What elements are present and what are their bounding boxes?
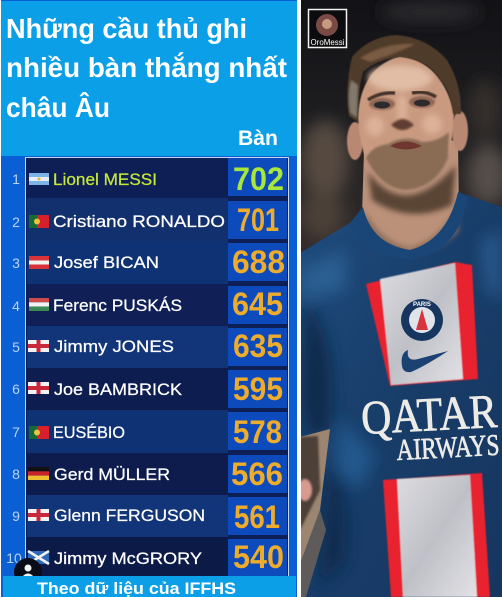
row 3: Josef Bican: Josef BICAN [54, 253, 159, 272]
row 2: Cristiano Ronaldo [12, 198, 287, 241]
nose [391, 119, 414, 130]
row 10: Jimmy McGrory: 540 [233, 539, 284, 575]
row 2: Cristiano Ronaldo: Cristiano RONALDO [53, 212, 225, 231]
row 7: Eusebio: 578 [233, 414, 282, 450]
flag: Argentina [29, 173, 49, 185]
row 9: Glenn Ferguson: 561 [234, 499, 280, 535]
panel header background [1, 1, 297, 156]
row 1: Lionel Messi [12, 158, 287, 198]
title: nhiều bàn thắng nhất [6, 52, 287, 83]
ears [347, 111, 468, 160]
flag: Scotland [28, 551, 49, 564]
hair [348, 35, 461, 122]
eyes [374, 100, 430, 108]
left ranking panel [1, 0, 297, 597]
hair highlights [360, 44, 415, 62]
jersey shading [300, 230, 502, 590]
eye sockets [369, 96, 435, 110]
row 4: Ferenc Puskas [12, 284, 287, 326]
row 5: Jimmy Jones: 5 [12, 339, 20, 355]
flag: Northern Ireland [28, 509, 49, 521]
title: Những cầu thủ ghi [6, 13, 247, 44]
neck shadow [368, 165, 456, 214]
footer source bar [3, 576, 296, 597]
row 4: Ferenc Puskas: 645 [232, 286, 283, 322]
row 6: Joe Bambrick [12, 368, 287, 410]
channel logo: OroMessi: OroMessi [310, 37, 345, 47]
row 10: Jimmy McGrory: 10 [6, 550, 22, 566]
row 10: Jimmy McGrory [6, 537, 287, 576]
row 3: Josef Bican: 688 [232, 244, 285, 280]
row 6: Joe Bambrick: 6 [12, 381, 20, 397]
flag: Northern Ireland [28, 340, 49, 352]
row 9: Glenn Ferguson: 9 [12, 508, 20, 524]
row 7: Eusebio: 7 [12, 424, 20, 440]
row 5: Jimmy Jones: Jimmy JONES [54, 337, 174, 356]
beard [366, 132, 449, 190]
forearm tattoo [298, 429, 330, 597]
PSG badge: PARIS [413, 302, 431, 308]
neck [362, 140, 459, 250]
icon: user avatar [14, 558, 42, 576]
table frame [26, 158, 288, 578]
row 4: Ferenc Puskas: Ferenc PUSKÁS [53, 296, 182, 315]
mouth [390, 142, 422, 150]
row 3: Josef Bican [12, 241, 287, 284]
row 8: Gerd Muller: 566 [231, 456, 283, 492]
row 7: Eusebio: EUSÉBIO [53, 423, 125, 442]
row 1: Lionel Messi: 702 [233, 161, 284, 197]
title [6, 13, 287, 123]
hair side grey [349, 80, 358, 118]
PSG badge [401, 299, 443, 341]
flag: Northern Ireland [28, 382, 49, 394]
face [358, 56, 455, 158]
channel logo: OroMessi [308, 10, 346, 48]
title: châu Âu [6, 92, 110, 123]
flag: Hungary [29, 298, 49, 311]
jersey body [300, 192, 502, 597]
row 2: Cristiano Ronaldo: 701 [237, 202, 279, 238]
row 6: Joe Bambrick: 595 [233, 371, 283, 407]
row 5: Jimmy Jones: 635 [233, 328, 283, 364]
row 10: Jimmy McGrory: Jimmy McGRORY [54, 549, 202, 568]
row 8: Gerd Muller: 8 [12, 466, 20, 482]
cheek highlights [366, 95, 442, 136]
row 9: Glenn Ferguson [12, 495, 287, 537]
photo: Messi in PSG jersey [298, 0, 502, 597]
row 6: Joe Bambrick: Joe BAMBRICK [54, 380, 183, 399]
forehead highlight [368, 65, 432, 91]
row 8: Gerd Muller: Gerd MÜLLER [54, 465, 170, 484]
Nike swoosh [402, 350, 448, 372]
eyebrows [368, 92, 436, 100]
row 5: Jimmy Jones [12, 326, 287, 368]
row 3: Josef Bican: 3 [12, 255, 20, 271]
blurred crowd background [300, 2, 502, 239]
flag: Portugal [29, 426, 49, 439]
upper jersey stripes [366, 262, 478, 386]
row 9: Glenn Ferguson: Glenn FERGUSON [54, 506, 205, 525]
flag: Portugal [29, 215, 49, 228]
lower jersey stripes [383, 473, 490, 597]
row 8: Gerd Muller [12, 453, 287, 495]
row 4: Ferenc Puskas: 4 [12, 298, 20, 314]
collar [351, 192, 468, 260]
neck collar shadow [364, 212, 462, 251]
row 1: Lionel Messi: 1 [12, 171, 20, 187]
flag: Germany [28, 467, 49, 480]
row 7: Eusebio [12, 410, 287, 453]
row 1: Lionel Messi: Lionel MESSI [53, 170, 157, 189]
column heading: goals: Bàn [238, 127, 278, 150]
row 2: Cristiano Ronaldo: 2 [12, 214, 20, 230]
flag: Austria [29, 256, 49, 269]
sponsor wordmark [362, 396, 498, 460]
